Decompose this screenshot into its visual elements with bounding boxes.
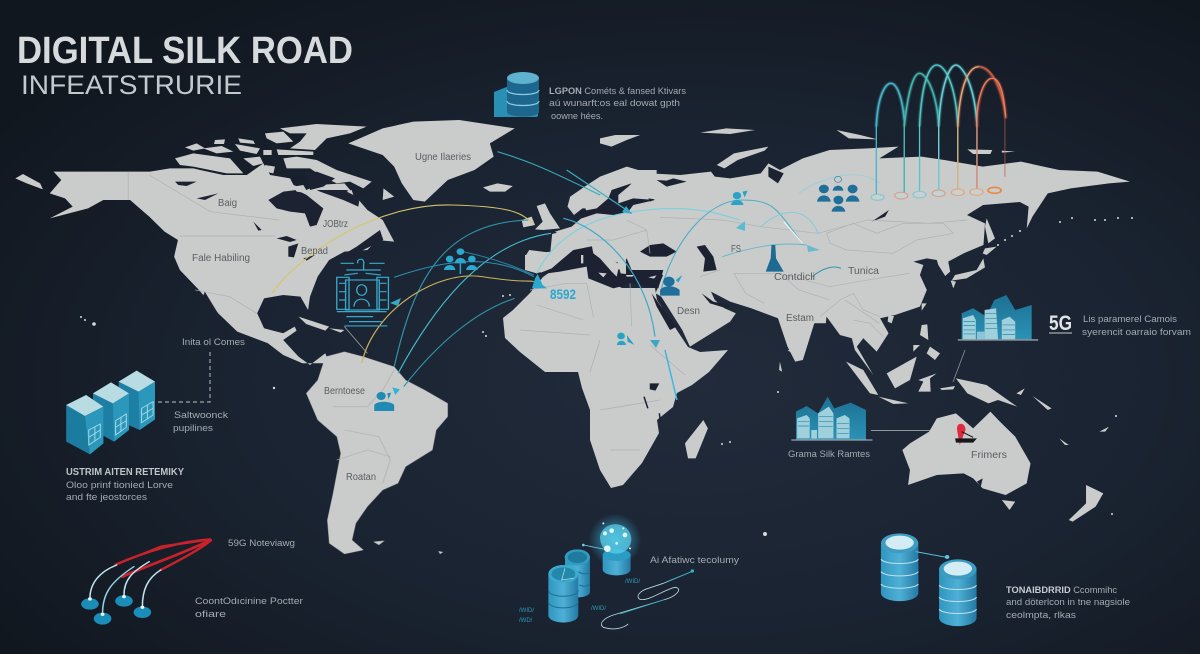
text: 5G description: syerencit oarraio forvam: [1082, 327, 1191, 338]
text: tiny teal annotations: /WID/: [519, 608, 534, 614]
text: networking labels: 59G Noteviawg: [228, 538, 295, 549]
icon: city skyline: [958, 295, 1038, 340]
text: server description: [66, 410, 228, 503]
text: 5G description: [1049, 312, 1191, 338]
map labels: Roatan: [346, 472, 376, 483]
panel: hybrid databases: [881, 533, 1130, 626]
landmass: Europe detail: [522, 170, 730, 330]
text: top description: aú wunarft:os eal dowat gpth: [549, 98, 680, 109]
icon: marker Central Asia: [766, 245, 784, 272]
map labels: FS: [731, 244, 741, 255]
text: tiny teal annotations: [519, 579, 640, 624]
text: top description: oowne hées.: [551, 111, 603, 122]
text: server description: USTRIM AITEN RETEMIKY: [66, 467, 184, 478]
map labels: Bepad: [301, 246, 328, 257]
icon: group of people over Siberia: [817, 176, 859, 212]
icon: two database cylinders: [881, 533, 977, 626]
text: tiny teal annotations: /WD/: [519, 618, 533, 624]
icon: red location pin: [955, 424, 977, 445]
panel: 59G networking: [81, 538, 303, 625]
icon: signal fountain arcs: [871, 65, 1006, 200]
map labels: 8592: [550, 286, 576, 302]
panel: top data server: [494, 72, 686, 122]
arrowheads: [390, 206, 820, 348]
text: server description: pupilines: [173, 423, 213, 434]
icon: network loops: [601, 569, 694, 629]
text: 5G description: Lis paramerel Camois: [1083, 314, 1177, 325]
text: server description: Saltwoonck: [174, 410, 228, 421]
icon: person South America: [374, 387, 400, 411]
title: [17, 30, 353, 100]
text: tiny teal annotations: /WID/: [591, 606, 606, 612]
landmass: East Asia islands: [820, 218, 997, 404]
map labels: JOBtrz: [323, 219, 348, 230]
landmass: Eurasia: [526, 128, 1130, 375]
title: DIGITAL SILK ROAD: [17, 30, 353, 72]
text: hybrid description: [1006, 585, 1130, 621]
text: server description: and fte jeostorces: [66, 492, 147, 503]
map labels: Berntoese: [324, 386, 365, 397]
map labels: Frimers: [971, 450, 1007, 461]
text: hybrid description: TONAIBDRRID Ccommihc: [1006, 585, 1117, 596]
text: Silk routes label: Grama Silk Ramtes: [788, 449, 870, 460]
icon: person Middle East: [660, 275, 682, 296]
map labels: Ugne Ilaeries: [415, 152, 471, 163]
text: 5G description: 5G: [1049, 312, 1072, 335]
map labels: Desn: [677, 306, 700, 317]
text: networking labels: [195, 538, 303, 620]
icon: skyline near Australia: [791, 397, 872, 440]
icon: fibre nodes with red beams: [81, 539, 210, 625]
icon: person Central Asia: [731, 191, 748, 205]
landmass: Africa borders: [520, 330, 685, 450]
icon: person Africa: [617, 333, 634, 345]
small island dots: [80, 217, 1133, 536]
map labels: Estam: [786, 313, 814, 324]
icon: glowing database cylinders: [548, 513, 642, 622]
title: INFEATSTRURIE: [21, 70, 242, 100]
icon: terminal monitor: [337, 259, 388, 326]
map labels: Baig: [218, 198, 237, 209]
network arcs: [272, 152, 879, 400]
panel: Silk routes city: [788, 397, 930, 460]
text: hybrid description: ceolmpta, rlkas: [1006, 610, 1076, 621]
text: tiny teal annotations: /WID/: [625, 579, 640, 585]
icon: people group Atlantic: [444, 248, 478, 274]
icon: teal person groups: [374, 176, 859, 411]
map labels: Tunica: [848, 266, 879, 277]
icon: server racks: [66, 371, 155, 454]
map labels: Fale Habiling: [192, 253, 250, 264]
landmass: North America: [15, 163, 394, 365]
text: AI label: Ai Afatiwc tecolumy: [650, 555, 739, 566]
panel: 5G city: [953, 295, 1191, 382]
landmass: Canadian Arctic and Hudson Bay: [175, 124, 383, 261]
panel: server racks: Inita ol Comes: [182, 337, 245, 348]
world map: [15, 120, 1133, 554]
text: hybrid description: and döterlcon in tne nagsiole: [1006, 597, 1130, 608]
icon: database box: [494, 72, 539, 117]
text: networking labels: CoontOdıcinine Poctter: [195, 596, 303, 607]
icon: marker West Africa: [532, 274, 547, 288]
panel: AI storage stack: [519, 513, 739, 629]
map labels: Contdicli: [774, 272, 815, 283]
text: top description: [549, 86, 686, 122]
text: server description: Oloo prinf tionied Lorve: [66, 480, 173, 491]
panel: server racks: [66, 337, 245, 503]
landmass: Africa: [503, 265, 728, 488]
landmass: South America: [306, 352, 448, 554]
landmass: Madagascar and Australasia: [644, 350, 1109, 522]
text: top description: LGPON Cométs & fansed Ktivars: [549, 86, 686, 97]
landmass: Greenland and Iceland: [348, 120, 515, 202]
map labels: [192, 152, 1007, 483]
text: networking labels: ofiare: [195, 609, 226, 620]
